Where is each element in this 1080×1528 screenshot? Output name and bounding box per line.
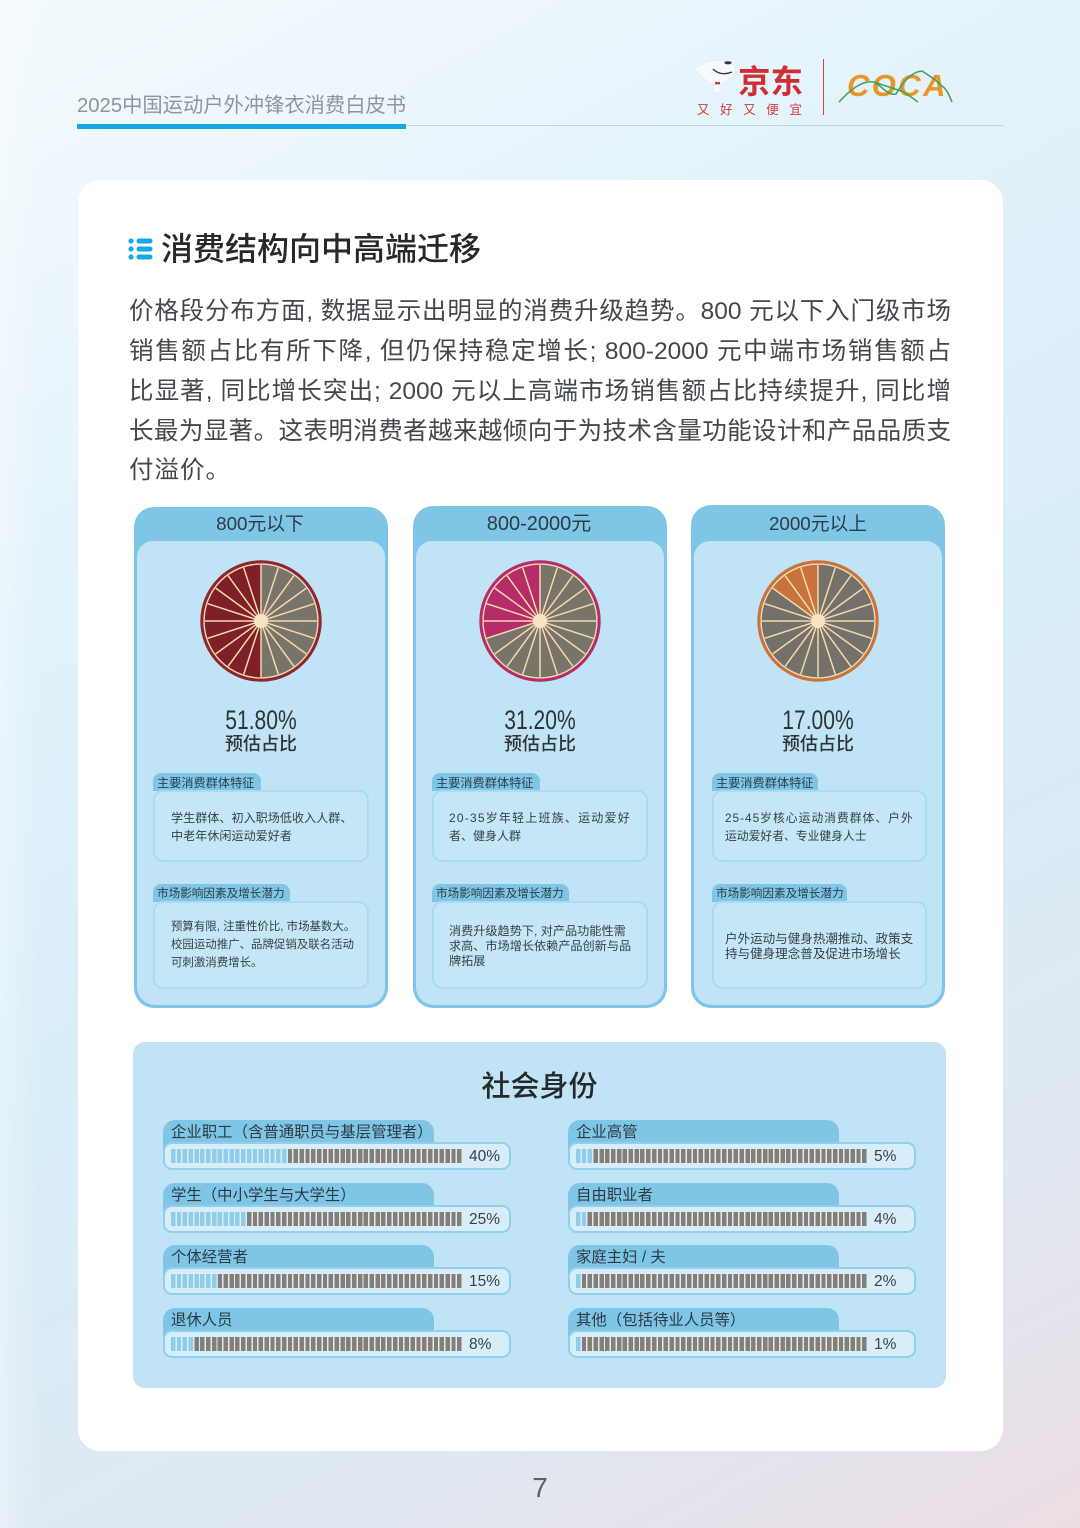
box: market factors — [712, 901, 927, 989]
bar: 个体经营者 15%: 15% — [469, 1273, 500, 1290]
panel: 800-2000元 — [413, 506, 667, 1008]
box: consumer traits: 20-35岁年轻上班族、运动爱好 — [449, 811, 631, 825]
bar: 个体经营者 15%: 个体经营者 — [171, 1249, 248, 1266]
share label: 预估占比 — [225, 734, 297, 754]
header rule — [77, 125, 1003, 126]
icon: list — [128, 238, 152, 260]
panel: main white card — [78, 180, 1003, 1451]
bar: 企业高管 5% — [568, 1120, 916, 1170]
tab: consumer traits: 主要消费群体特征 — [716, 776, 814, 790]
text block: intro paragraph: 销售额占比有所下降, 但仍保持稳定增长; 800-2000 元中端市场销售额占 — [129, 338, 951, 365]
bar: 自由职业者 4%: 4% — [874, 1210, 896, 1228]
bar: 退休人员 8%: 退休人员 — [171, 1312, 233, 1329]
logo: JD — [694, 60, 813, 117]
panel: 2000元以上 — [691, 505, 945, 1008]
icon: green mountain line — [838, 70, 953, 102]
tab: market factors — [153, 884, 290, 902]
bar: 其他 1%: 其他（包括待业人员等） — [576, 1312, 745, 1329]
share value: 17.00% — [782, 705, 854, 735]
card title: 2000元以上 — [769, 513, 867, 534]
tab: market factors: 市场影响因素及增长潜力 — [436, 887, 564, 900]
box: market factors — [432, 901, 648, 989]
box: consumer traits — [432, 790, 648, 862]
box: market factors: 求高、市场增长依赖产品创新与品 — [449, 939, 631, 953]
bar: 个体经营者 15% — [163, 1245, 511, 1295]
bar: 企业职工 40% — [163, 1120, 511, 1170]
bar: 其他 1% — [568, 1308, 916, 1358]
box: consumer traits — [712, 790, 927, 862]
panel heading: 社会身份 — [481, 1071, 598, 1103]
share value: 51.80% — [225, 705, 297, 735]
logo: COCA — [838, 68, 953, 103]
box: market factors: 消费升级趋势下, 对产品功能性需 — [449, 924, 626, 938]
text block: intro paragraph — [129, 298, 951, 484]
box: market factors: 户外运动与健身热潮推动、政策支 — [725, 932, 913, 946]
card title: 800-2000元 — [487, 513, 591, 535]
bar: 学生 25%: 学生（中小学生与大学生） — [171, 1186, 356, 1204]
box: consumer traits: 25-45岁核心运动消费群体、户外 — [725, 811, 914, 825]
bar: 企业高管 5%: 企业高管 — [576, 1124, 638, 1141]
share label: 预估占比 — [504, 734, 576, 754]
bar: 退休人员 8%: 8% — [469, 1336, 491, 1353]
bar: 自由职业者 4% — [568, 1183, 916, 1233]
pie chart: 17.00% — [757, 560, 879, 682]
tab: market factors — [432, 884, 569, 902]
logo wordmark: 京东 — [738, 64, 803, 100]
bar: 家庭主妇 / 夫 2%: 家庭主妇 / 夫 — [576, 1249, 666, 1266]
box: consumer traits: 运动爱好者、专业健身人士 — [725, 829, 867, 843]
pie chart: 51.80% — [200, 560, 322, 682]
header title: 2025中国运动户外冲锋衣消费白皮书 — [77, 95, 406, 117]
box: market factors — [153, 901, 369, 989]
pie chart: 31.20% — [479, 560, 601, 682]
tab: consumer traits: 主要消费群体特征 — [157, 776, 254, 790]
icon: JD mascot — [694, 60, 736, 94]
logo slogan: 又好又便宜 — [697, 103, 813, 117]
box: market factors: 校园运动推广、品牌促销及联名活动 — [171, 939, 354, 951]
text block: intro paragraph: 比显著, 同比增长突出; 2000 元以上高端市场销售额占比持续提升, 同比增 — [129, 378, 951, 405]
text block: intro paragraph: 价格段分布方面, 数据显示出明显的消费升级趋势。800 元以下入门级市场 — [129, 298, 951, 325]
tab: market factors — [712, 884, 847, 902]
box: consumer traits — [153, 790, 369, 862]
bar: 自由职业者 4%: 自由职业者 — [576, 1186, 653, 1204]
bar: 学生 25%: 25% — [469, 1210, 500, 1228]
box: consumer traits: 学生群体、初入职场低收入人群、 — [171, 811, 352, 825]
panel: 社会身份 — [133, 1042, 946, 1388]
box: market factors: 可刺激消费增长。 — [171, 957, 262, 969]
panel: 800元以下 — [134, 507, 388, 1008]
section heading: 消费结构向中高端迁移 — [161, 231, 481, 267]
tab: market factors: 市场影响因素及增长潜力 — [716, 887, 844, 900]
tab: market factors: 市场影响因素及增长潜力 — [157, 887, 285, 900]
share label: 预估占比 — [782, 734, 854, 754]
tab: consumer traits: 主要消费群体特征 — [436, 776, 534, 790]
bar: 其他 1%: 1% — [874, 1336, 896, 1353]
bar: 企业职工 40%: 40% — [469, 1148, 500, 1165]
bar: 退休人员 8% — [163, 1308, 511, 1358]
logo divider — [823, 59, 824, 115]
bar: 企业高管 5%: 5% — [874, 1148, 896, 1165]
header accent bar — [77, 124, 406, 129]
text block: intro paragraph: 付溢价。 — [129, 457, 231, 484]
text block: intro paragraph: 长最为显著。这表明消费者越来越倾向于为技术含量功能设计和产品品质支 — [129, 418, 951, 445]
bar: 家庭主妇 / 夫 2% — [568, 1245, 916, 1295]
box: market factors: 牌拓展 — [449, 954, 485, 968]
card title: 800元以下 — [216, 513, 304, 534]
page number: 7 — [532, 1472, 548, 1503]
box: consumer traits: 中老年休闲运动爱好者 — [171, 829, 292, 843]
share value: 31.20% — [504, 705, 576, 735]
logo text: COCA — [847, 68, 948, 103]
box: consumer traits: 者、健身人群 — [449, 829, 521, 843]
bar: 家庭主妇 / 夫 2%: 2% — [874, 1273, 896, 1290]
box: market factors: 预算有限, 注重性价比, 市场基数大。 — [171, 921, 355, 933]
bar: 企业职工 40%: 企业职工（含普通职员与基层管理者） — [171, 1124, 433, 1141]
bar: 学生 25% — [163, 1183, 511, 1233]
box: market factors: 持与健身理念普及促进市场增长 — [725, 946, 901, 960]
